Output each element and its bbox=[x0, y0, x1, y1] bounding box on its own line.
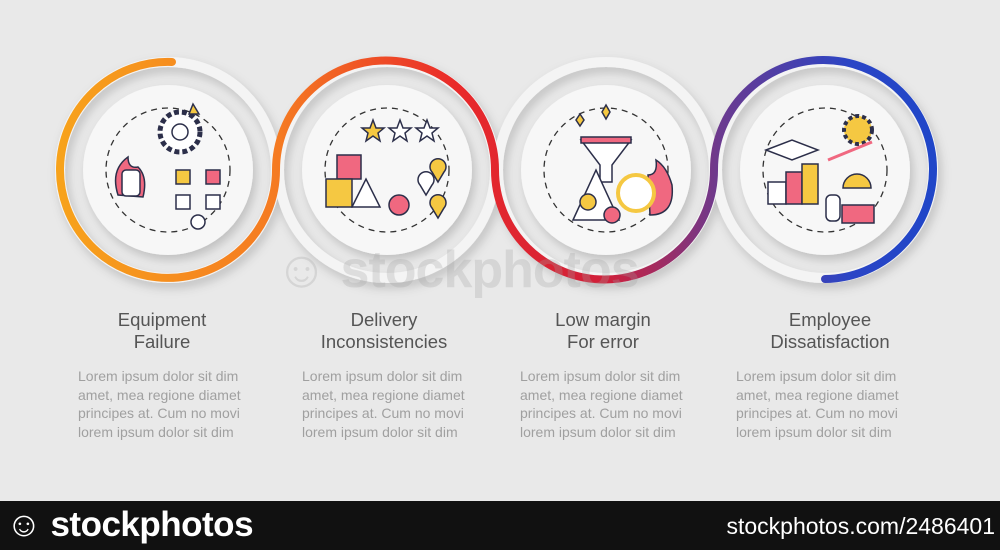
body 2: Lorem ipsum dolor sit dim amet, mea regione diamet principes at. Cum no movi lorem ipsum dolor sit dim bbox=[302, 368, 465, 440]
title 1: Equipment bbox=[118, 309, 206, 330]
gray rings bbox=[60, 62, 933, 278]
body 4: Lorem ipsum dolor sit dim amet, mea regione diamet principes at. Cum no movi lorem ipsum dolor sit dim bbox=[736, 368, 899, 440]
title 2: Inconsistencies bbox=[321, 331, 447, 352]
title 2 bbox=[321, 309, 447, 352]
icon: employee dissatisfaction bbox=[766, 116, 874, 223]
icon: delivery inconsistencies bbox=[326, 120, 446, 218]
body 3: Lorem ipsum dolor sit dim amet, mea regione diamet principes at. Cum no movi lorem ipsum dolor sit dim bbox=[520, 368, 683, 440]
column 3: Low margin for error bbox=[520, 309, 683, 440]
icon: equipment failure bbox=[116, 104, 220, 229]
inner white circles bbox=[83, 85, 910, 255]
footer logo: ☺ stockphotos bbox=[6, 505, 253, 544]
footer bar bbox=[0, 501, 1000, 550]
watermark: ☺ stockphotos bbox=[275, 241, 639, 299]
title 2: Delivery bbox=[351, 309, 417, 330]
title 3 bbox=[555, 309, 651, 352]
dashed circles bbox=[106, 108, 887, 232]
title 4: Employee bbox=[789, 309, 871, 330]
title 1 bbox=[118, 309, 206, 352]
footer id: stockphotos.com/2486401 bbox=[726, 513, 995, 539]
title 4: Dissatisfaction bbox=[770, 331, 890, 352]
body 1: Lorem ipsum dolor sit dim amet, mea regione diamet principes at. Cum no movi lorem ipsum dolor sit dim bbox=[78, 368, 241, 440]
title 3: For error bbox=[567, 331, 639, 352]
diagram: rings and icons bbox=[54, 56, 945, 292]
title 1: Failure bbox=[134, 331, 190, 352]
column 4: Employee Dissatisfaction bbox=[736, 309, 899, 440]
title 3: Low margin bbox=[555, 309, 651, 330]
colored snake path bbox=[60, 60, 933, 279]
column 2: Delivery Inconsistencies bbox=[302, 309, 465, 440]
column 1: Equipment Failure bbox=[78, 309, 241, 440]
title 4 bbox=[770, 309, 890, 352]
icon: low margin for error bbox=[573, 105, 672, 223]
